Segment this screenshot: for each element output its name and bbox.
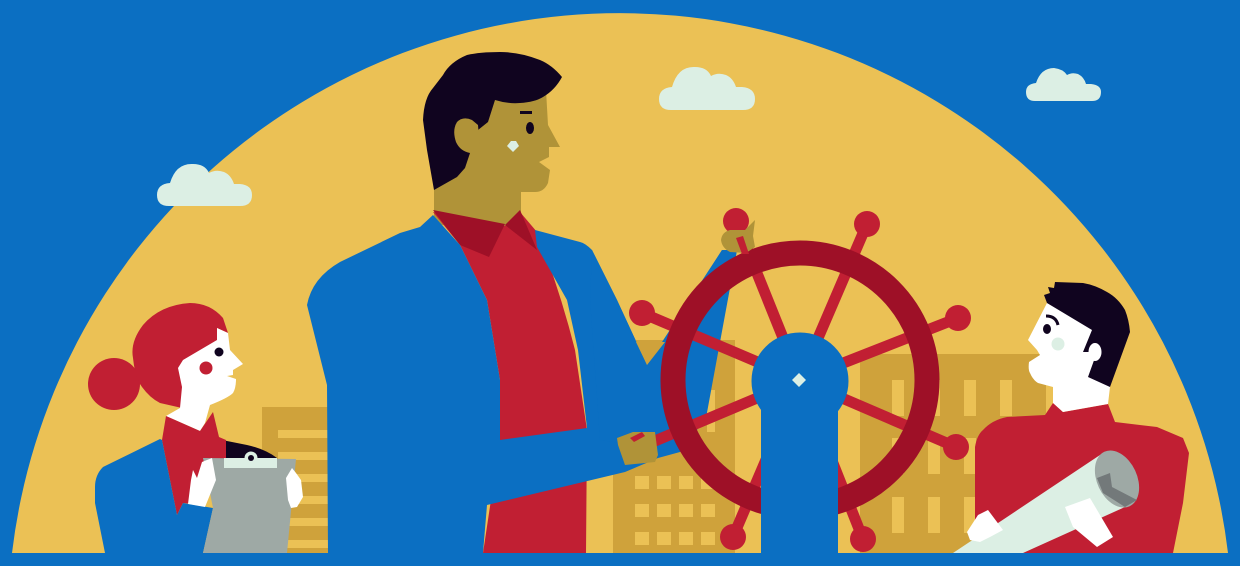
eyebrow	[1046, 316, 1058, 325]
scroll inner shadow	[1097, 473, 1137, 507]
hair	[132, 303, 228, 408]
building: left striped	[262, 407, 329, 553]
hub	[792, 373, 806, 387]
gap triangle	[636, 342, 665, 365]
spoke over hand	[736, 236, 749, 254]
building: right with windows	[860, 354, 1046, 553]
collar left	[433, 210, 505, 257]
jacket	[95, 439, 213, 553]
spoke over hand	[630, 432, 645, 442]
scroll end	[1086, 443, 1148, 515]
hair bun	[88, 358, 140, 410]
ear	[1088, 343, 1102, 361]
eye	[1043, 324, 1051, 334]
collar right	[505, 210, 537, 250]
building: centre with windows	[613, 340, 735, 553]
head and neck	[434, 90, 560, 226]
woman with clipboard	[88, 303, 303, 553]
captain's lower hand	[617, 432, 658, 465]
wheel pedestal	[752, 332, 848, 556]
captain's upper hand	[721, 220, 755, 254]
cloud: left	[157, 164, 252, 206]
jacket and forearm	[307, 215, 737, 553]
man with scroll	[953, 282, 1189, 553]
clipboard	[203, 458, 296, 553]
right hand	[1065, 498, 1113, 547]
knobs	[629, 208, 971, 552]
left hand	[188, 458, 216, 507]
scroll	[953, 455, 1125, 553]
eye	[526, 122, 534, 134]
cheek	[507, 141, 519, 152]
raised arm	[590, 250, 737, 452]
right hand	[286, 468, 303, 508]
eye	[214, 348, 224, 356]
cloud: right	[1026, 68, 1101, 101]
cheek	[200, 362, 212, 374]
dark top	[222, 440, 277, 460]
hair	[423, 52, 562, 190]
face and neck	[166, 328, 243, 431]
cloud: centre	[659, 67, 755, 110]
eyebrow	[520, 111, 532, 114]
clipboard clip	[224, 452, 277, 468]
captain	[307, 52, 737, 553]
left hand	[967, 510, 1003, 542]
ear	[454, 118, 480, 153]
spokes	[642, 221, 958, 539]
shirt	[162, 412, 226, 515]
head and neck	[1028, 303, 1110, 412]
body	[975, 403, 1189, 553]
ship's wheel	[629, 208, 971, 552]
shirt	[433, 212, 587, 553]
hair	[1044, 282, 1130, 387]
cheek	[1052, 338, 1064, 350]
ground strip	[0, 553, 1240, 566]
rim	[673, 253, 927, 507]
